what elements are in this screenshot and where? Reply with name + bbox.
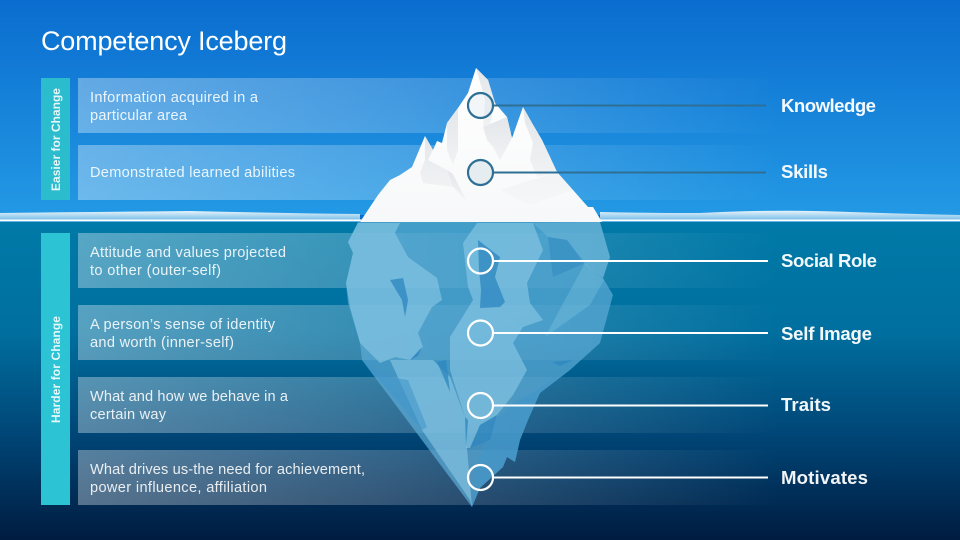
background: sky bbox=[0, 0, 960, 215]
label: skills: Skills bbox=[781, 161, 828, 182]
title: Competency Iceberg bbox=[41, 26, 287, 56]
connector and marker: skills bbox=[468, 160, 766, 185]
medium blue facets bbox=[362, 360, 573, 507]
connector and marker: self image bbox=[468, 320, 768, 346]
band: knowledge bbox=[78, 78, 780, 133]
description: social role: Attitude and values projected bbox=[90, 245, 286, 261]
band: motivates bbox=[78, 450, 780, 505]
label: social role: Social Role bbox=[781, 250, 877, 271]
panel: easier for change side bar bbox=[41, 78, 70, 200]
panel: harder for change side bar bbox=[41, 233, 70, 505]
description: self image: and worth (inner-self) bbox=[90, 335, 234, 351]
description: social role: to other (outer-self) bbox=[90, 263, 221, 279]
description: knowledge: particular area bbox=[90, 108, 188, 124]
label: traits: Traits bbox=[781, 394, 831, 415]
light ice panels bbox=[346, 222, 610, 507]
water surface bbox=[0, 211, 960, 222]
description: traits: certain way bbox=[90, 407, 167, 423]
dark crack facets bbox=[390, 237, 585, 448]
description: motivates: What drives us-the need for achievement, bbox=[90, 462, 365, 478]
connector and marker: social role bbox=[468, 248, 768, 274]
band: social role bbox=[78, 233, 780, 288]
connector and marker: traits bbox=[468, 393, 768, 418]
band: traits bbox=[78, 377, 780, 433]
background: sea bbox=[0, 221, 960, 540]
band: self image bbox=[78, 305, 780, 360]
description: knowledge: Information acquired in a bbox=[90, 90, 259, 106]
description: motivates: power influence, affiliation bbox=[90, 480, 267, 496]
label: knowledge: Knowledge bbox=[781, 95, 876, 116]
label: self image: Self Image bbox=[781, 323, 872, 344]
label: easier for change: Easier for Change bbox=[49, 88, 63, 191]
description: skills: Demonstrated learned abilities bbox=[90, 165, 295, 181]
ice shadow facets bbox=[420, 68, 573, 205]
connector and marker: knowledge bbox=[468, 93, 766, 118]
label: harder for change: Harder for Change bbox=[49, 316, 63, 423]
iceberg below water bbox=[346, 222, 613, 507]
connector and marker: motivates bbox=[468, 465, 768, 490]
iceberg above water bbox=[360, 68, 602, 222]
description: self image: A person’s sense of identity bbox=[90, 317, 276, 333]
description: traits: What and how we behave in a bbox=[90, 389, 289, 405]
band: skills bbox=[78, 145, 780, 200]
label: motivates: Motivates bbox=[781, 467, 868, 488]
